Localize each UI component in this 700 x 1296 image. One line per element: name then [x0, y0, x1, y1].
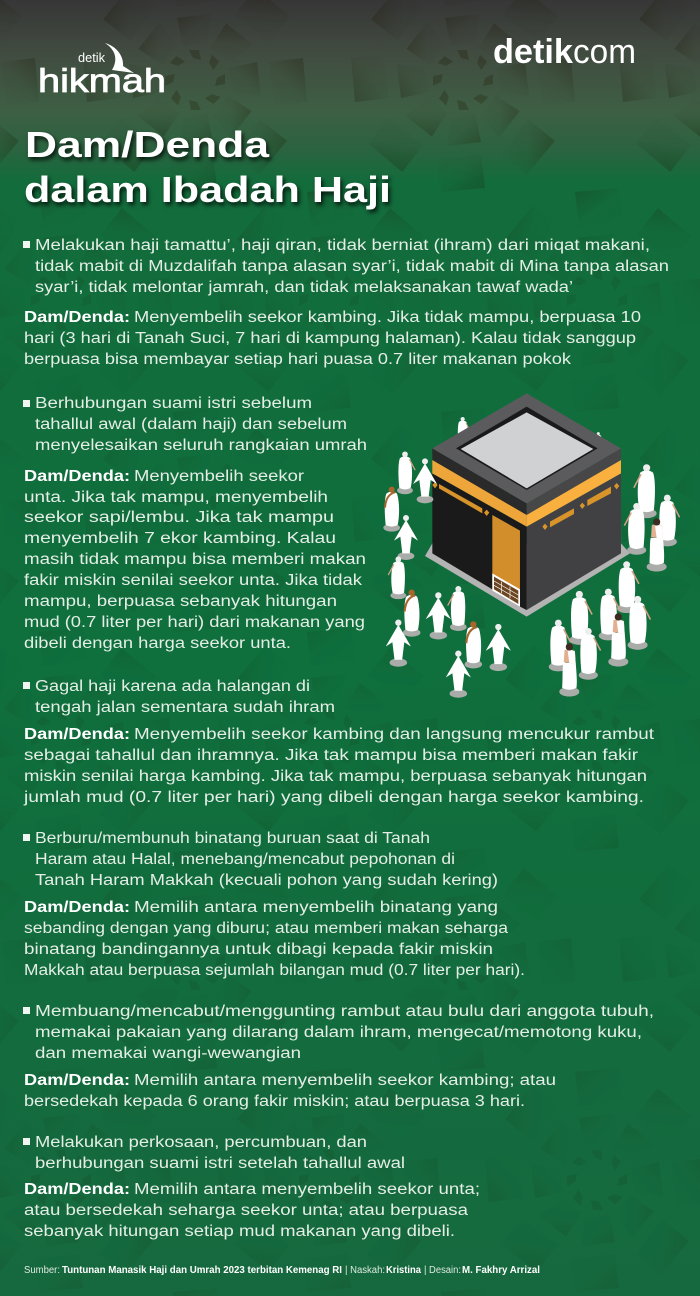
source credits	[24, 1265, 540, 1276]
item 1: Melakukan haji tamattu’, haji qiran, tidak berniat (ihram) dari miqat makani,	[35, 237, 650, 254]
item 4: Dam/Denda:	[24, 899, 130, 916]
item 4: binatang bandingannya untuk dibagi kepada fakir miskin	[24, 941, 493, 958]
item 5	[23, 1003, 654, 1110]
item 6: Dam/Denda:	[24, 1181, 130, 1198]
source credits: | Naskah:	[345, 1265, 385, 1276]
pilgrims	[383, 451, 680, 698]
item 5: dan memakai wangi-wewangian	[35, 1045, 301, 1062]
item 1: hari (3 hari di Tanah Suci, 7 hari di kampung halaman). Kalau tidak sanggup	[24, 330, 636, 347]
item 3	[23, 678, 655, 806]
item 6: atau bersedekah seharga seekor unta; atau berpuasa	[24, 1202, 468, 1219]
item 2: seekor sapi/lembu. Jika tak mampu	[24, 509, 334, 526]
item 3: Dam/Denda:	[24, 726, 130, 743]
item 6: berhubungan suami istri setelah tahallul awal	[35, 1155, 405, 1172]
item 6: sebanyak hitungan setiap mud makanan yang dibeli.	[24, 1223, 455, 1240]
item 2: Menyembelih seekor	[134, 468, 304, 485]
item 4: Memilih antara menyembelih binatang yang	[134, 899, 498, 916]
item 1	[23, 237, 669, 368]
title	[24, 124, 391, 210]
item 2: menyelesaikan seluruh rangkaian umrah	[35, 437, 367, 454]
item 1: syar’i, tidak melontar jamrah, dan tidak melaksanakan tawaf wada’	[35, 279, 573, 296]
title: Dam/Denda	[25, 124, 270, 165]
item 3: Menyembelih seekor kambing dan langsung mencukur rambut	[134, 726, 655, 743]
item 1: berpuasa bisa membayar setiap hari puasa 0.7 liter makanan pokok	[24, 351, 571, 368]
item 1: Menyembelih seekor kambing. Jika tidak mampu, berpuasa 10	[134, 309, 641, 326]
item 2	[23, 395, 367, 652]
item 1: Dam/Denda:	[24, 309, 130, 326]
logo: detik hikmah	[38, 43, 166, 99]
item 5: memakai pakaian yang dilarang dalam ihram, mengecat/memotong kuku,	[35, 1024, 642, 1041]
item 2: mud (0.7 liter per hari) dari makanan yang	[24, 614, 365, 631]
item 2: tahallul awal (dalam haji) dan sebelum	[35, 416, 347, 433]
item 2: dibeli dengan harga seekor unta.	[24, 635, 291, 652]
source credits: Sumber:	[24, 1265, 60, 1276]
item 2: Dam/Denda:	[24, 468, 130, 485]
item 2: Berhubungan suami istri sebelum	[35, 395, 312, 412]
item 3: miskin senilai harga kambing. Jika tak mampu, berpuasa sebanyak hitungan	[24, 768, 647, 785]
item 5: Dam/Denda:	[24, 1072, 130, 1089]
item 3: Gagal haji karena ada halangan di	[35, 678, 310, 695]
logo: detikcom: detik	[493, 33, 573, 71]
item 2: unta. Jika tak mampu, menyembelih	[24, 489, 328, 506]
source credits: | Desain:	[424, 1265, 461, 1276]
item 5: Membuang/mencabut/menggunting rambut atau bulu dari anggota tubuh,	[35, 1003, 654, 1020]
logo: detik hikmah: hikmah	[38, 62, 166, 99]
Kaaba	[425, 393, 630, 617]
item 4: sebanding dengan yang diburu; atau memberi makan seharga	[24, 920, 508, 937]
logo: detikcom	[493, 33, 636, 71]
source credits: Kristina	[386, 1265, 421, 1276]
item 2: mampu, berpuasa sebanyak hitungan	[24, 593, 337, 610]
source credits: Tuntunan Manasik Haji dan Umrah 2023 terbitan Kemenag RI	[62, 1265, 342, 1276]
item 2: fakir miskin senilai seekor unta. Jika tidak	[24, 572, 362, 589]
source credits: M. Fakhry Arrizal	[462, 1265, 540, 1276]
illustration: Kaaba with pilgrims	[383, 393, 680, 698]
item 1: tidak mabit di Muzdalifah tanpa alasan syar’i, tidak mabit di Mina tanpa alasan	[35, 258, 669, 275]
item 4: Makkah atau berpuasa sejumlah bilangan mud (0.7 liter per hari).	[24, 962, 525, 979]
item 3: jumlah mud (0.7 liter per hari) yang dibeli dengan harga seekor kambing.	[23, 789, 644, 806]
item 4: Tanah Haram Makkah (kecuali pohon yang sudah kering)	[35, 872, 498, 889]
item 3: tengah jalan sementara sudah ihram	[35, 699, 335, 716]
logo: detik hikmah: detik	[78, 50, 105, 65]
title: dalam Ibadah Haji	[24, 169, 391, 210]
item 6	[23, 1134, 480, 1240]
item 4: Berburu/membunuh binatang buruan saat di Tanah	[35, 830, 430, 847]
logo: detikcom: com	[573, 33, 636, 71]
item 2: menyembelih 7 ekor kambing. Kalau	[24, 530, 336, 547]
item 4: Haram atau Halal, menebang/mencabut pepohonan di	[35, 851, 455, 868]
item 3: sebagai tahallul dan ihramnya. Jika tak mampu bisa memberi makan fakir	[24, 747, 638, 764]
item 2: masih tidak mampu bisa memberi makan	[24, 551, 366, 568]
item 5: bersedekah kepada 6 orang fakir miskin; atau berpuasa 3 hari.	[24, 1093, 525, 1110]
item 5: Memilih antara menyembelih seekor kambing; atau	[134, 1072, 556, 1089]
item 6: Melakukan perkosaan, percumbuan, dan	[35, 1134, 367, 1151]
item 6: Memilih antara menyembelih seekor unta;	[134, 1181, 480, 1198]
item 4	[23, 830, 525, 979]
